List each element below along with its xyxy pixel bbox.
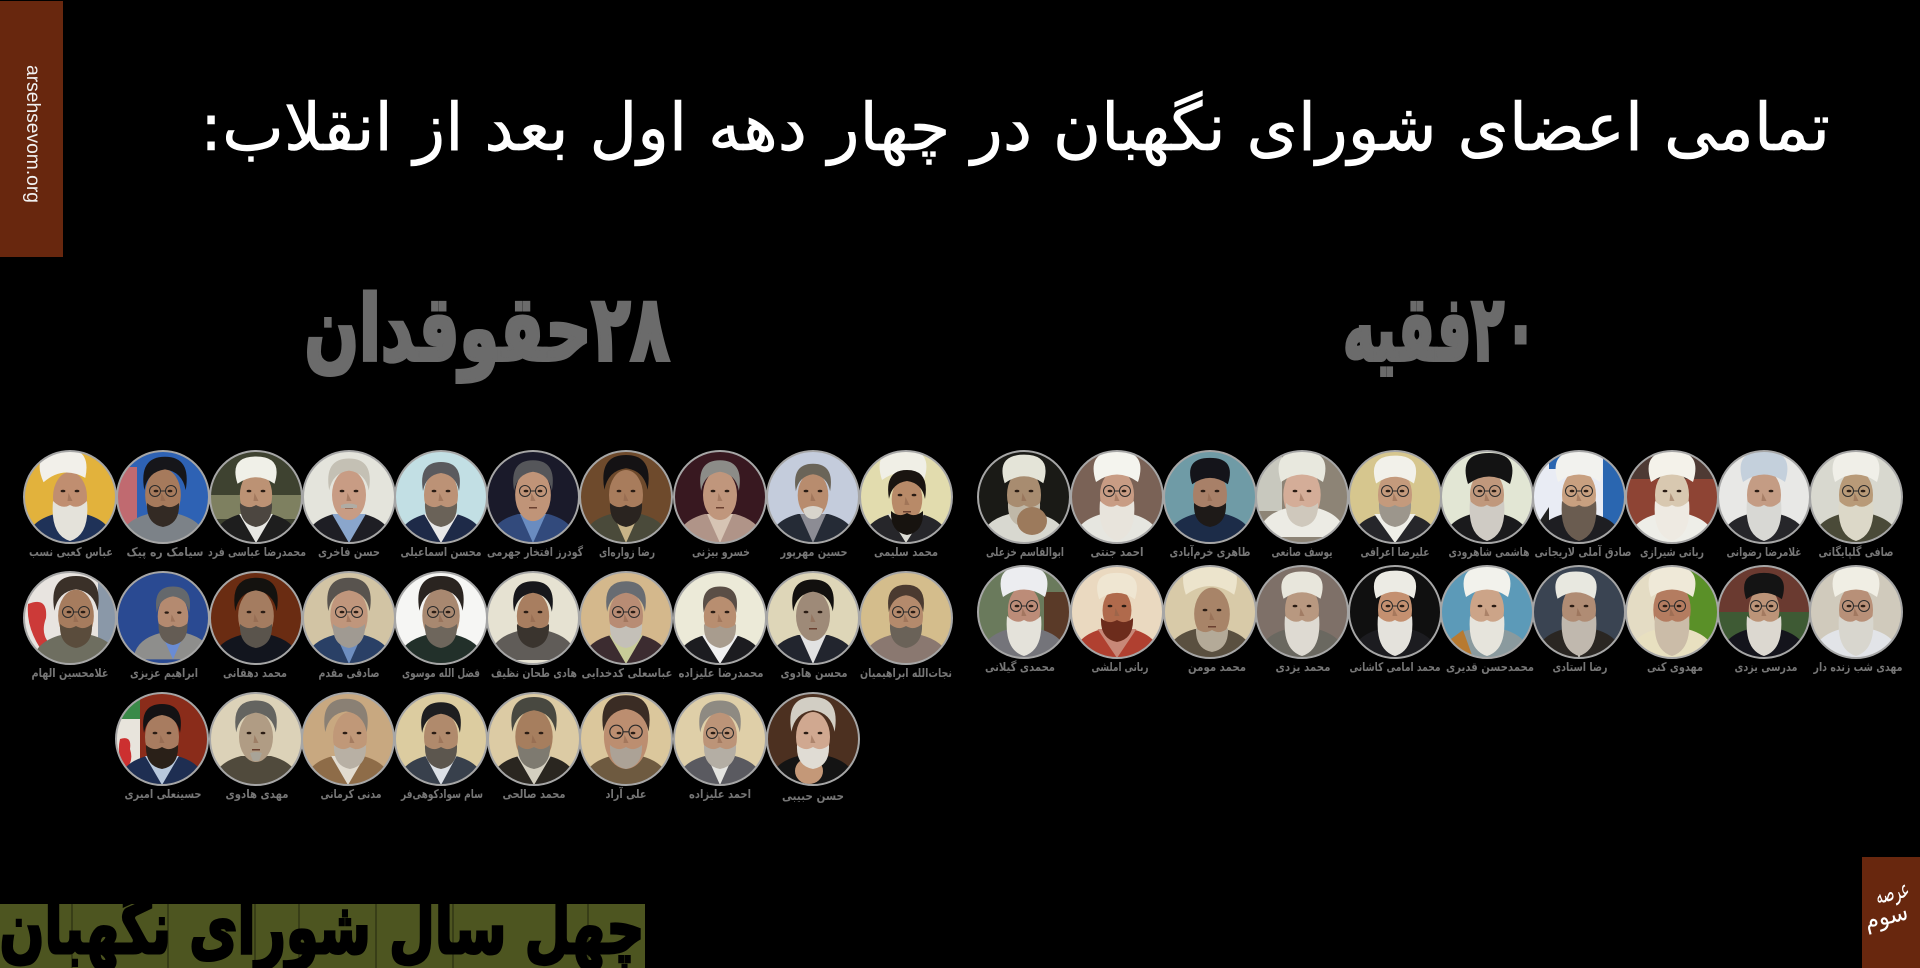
portrait: محمد یزدی bbox=[1256, 566, 1348, 674]
portrait: محمد یزدی: محمد یزدی bbox=[1276, 660, 1330, 674]
logo tab: سوم bbox=[1861, 897, 1911, 935]
portrait: عباسعلی کدخدایی: عباسعلی کدخدایی bbox=[582, 666, 672, 680]
title: تمامی اعضای شورای نگهبان در چهار دهه اول بعد از انقلاب: bbox=[200, 89, 1830, 166]
portrait: محمدی گیلانی bbox=[978, 566, 1070, 674]
portrait: گودرز افتخار جهرمی bbox=[487, 451, 583, 560]
portrait: طاهری خرم آبادی bbox=[1164, 451, 1256, 560]
portrait: محمد دهقانی: محمد دهقانی bbox=[223, 666, 287, 680]
portrait: غلامحسین الهام: غلامحسین الهام bbox=[32, 666, 108, 681]
portrait: صادقی مقدم: صادقی مقدم bbox=[318, 666, 380, 681]
portrait: گودرز افتخار جهرمی: گودرز افتخار جهرمی bbox=[487, 545, 583, 560]
portrait: محمد مومن: محمد مومن bbox=[1188, 660, 1246, 675]
portrait: ابراهیم عزیزی: ابراهیم عزیزی bbox=[130, 666, 198, 680]
portrait: مهدوی کنی bbox=[1626, 566, 1718, 675]
portrait: رضا استادی bbox=[1533, 566, 1625, 674]
portrait: صافی گلپایگانی bbox=[1810, 451, 1902, 559]
portrait: غلامرضا رضوانی: غلامرضا رضوانی bbox=[1726, 545, 1802, 560]
portrait: نجات‌الله ابراهیمیان: نجات‌الله ابراهیمیان bbox=[860, 666, 952, 680]
portrait: عباس کعبی نسب: عباس کعبی نسب bbox=[29, 545, 113, 559]
portrait: هاشمی شاهرودی bbox=[1441, 451, 1533, 560]
portrait: خسرو بیژنی bbox=[674, 451, 766, 560]
portrait: غلامرضا رضوانی bbox=[1718, 451, 1810, 560]
portrait: محسن هادوی bbox=[767, 572, 859, 681]
portrait: محمد سلیمی: محمد سلیمی bbox=[874, 545, 938, 559]
portrait: محمدرضا عباسی فرد: محمدرضا عباسی فرد bbox=[208, 545, 306, 559]
portrait: خسرو بیژنی: خسرو بیژنی bbox=[692, 545, 750, 560]
portrait: حسینعلی امیری bbox=[116, 693, 208, 801]
panel: 28 jurists portraits bbox=[24, 447, 952, 803]
portrait: مدنی کرمانی: مدنی کرمانی bbox=[320, 787, 382, 801]
portrait: علی آراد bbox=[580, 693, 672, 801]
portrait: ربانی املشی bbox=[1071, 566, 1163, 674]
portrait: سیامک ره پیک bbox=[117, 451, 209, 559]
portrait: مهدوی کنی: مهدوی کنی bbox=[1647, 660, 1703, 675]
portrait: حسین مهرپور bbox=[767, 451, 859, 560]
portrait: صافی گلپایگانی: صافی گلپایگانی bbox=[1818, 545, 1894, 559]
portrait: فضل الله موسوی bbox=[395, 572, 487, 681]
portrait: سام سوادکوهی فر bbox=[395, 693, 487, 802]
portrait: سام سوادکوهی فر: سام سوادکوهی‌فر bbox=[400, 787, 483, 802]
portrait: محسن هادوی: محسن هادوی bbox=[780, 666, 848, 681]
portrait: هادی طحان نظیف: هادی طحان نظیف bbox=[491, 666, 577, 680]
portrait: احمد علیزاده bbox=[674, 693, 766, 801]
portrait: نجات‌الله ابراهیمیان bbox=[860, 572, 952, 680]
portrait: رضا زواره‌ای: رضا زواره‌ای bbox=[599, 545, 655, 560]
portrait: محمدرضا علیزاده: محمدرضا علیزاده bbox=[678, 666, 764, 680]
portrait: محمد سلیمی bbox=[860, 449, 952, 559]
portrait: حسن فاخری: حسن فاخری bbox=[318, 545, 380, 559]
portrait: مهدی هادوی bbox=[210, 693, 302, 802]
portrait: سیامک ره پیک: سیامک ره پیک bbox=[126, 545, 204, 559]
portrait: یوسف صانعی: یوسف صانعی bbox=[1272, 545, 1332, 560]
portrait: عباسعلی کدخدایی bbox=[580, 572, 672, 680]
heading: 28 jurists: ۲۸حقوقدان bbox=[304, 277, 670, 382]
portrait: حسن فاخری bbox=[303, 451, 395, 559]
portrait: حسینعلی امیری: حسینعلی امیری bbox=[124, 787, 202, 801]
portrait: ابوالقاسم خزعلی: ابوالقاسم خزعلی bbox=[986, 545, 1064, 560]
portrait: احمد جنتی: احمد جنتی bbox=[1090, 545, 1144, 559]
logo tab bbox=[1861, 857, 1920, 968]
portrait: رضا استادی: رضا استادی bbox=[1552, 660, 1608, 674]
portrait: یوسف صانعی bbox=[1256, 451, 1348, 560]
portrait: رضا زواره‌ای bbox=[580, 451, 672, 560]
portrait: مهدی هادوی: مهدی هادوی bbox=[226, 787, 289, 802]
portrait: محمدحسن قدیری bbox=[1441, 566, 1534, 674]
portrait: مدنی کرمانی bbox=[302, 693, 394, 801]
portrait: عباس کعبی نسب bbox=[24, 447, 116, 559]
portrait: محمد صالحی: محمد صالحی bbox=[502, 787, 566, 801]
portrait: مدرسی یزدی: مدرسی یزدی bbox=[1734, 660, 1798, 674]
portrait: صادق آملی لاریجانی bbox=[1533, 451, 1632, 559]
portrait: حسین مهرپور: حسین مهرپور bbox=[780, 545, 848, 560]
portrait: غلامحسین الهام bbox=[24, 572, 120, 681]
portrait: محمد مومن bbox=[1164, 559, 1256, 675]
portrait: محمدرضا علیزاده bbox=[674, 572, 766, 680]
portrait: ربانی املشی: ربانی املشی bbox=[1092, 660, 1149, 674]
side tab: website: arsehsevom.org bbox=[22, 65, 43, 203]
portrait: محمد امامی کاشانی: محمد امامی کاشانی bbox=[1350, 660, 1440, 674]
heading: 20 clerics: ۲۰فقیه bbox=[1343, 277, 1537, 382]
portrait: محسن اسماعیلی bbox=[395, 451, 487, 559]
portrait: محمد صالحی bbox=[488, 693, 580, 801]
portrait: ربانی شیرازی: ربانی شیرازی bbox=[1640, 545, 1704, 559]
portrait: حسن حبیبی bbox=[767, 693, 859, 803]
portrait: صادقی مقدم bbox=[303, 572, 395, 681]
portrait: هاشمی شاهرودی: هاشمی شاهرودی bbox=[1448, 545, 1530, 560]
portrait: محمد امامی کاشانی bbox=[1349, 566, 1441, 674]
portrait: احمد علیزاده: احمد علیزاده bbox=[689, 787, 751, 801]
portrait: ربانی شیرازی bbox=[1626, 451, 1718, 559]
portrait: طاهری خرم آبادی: طاهری خرم‌آبادی bbox=[1170, 544, 1250, 560]
portrait: محمدحسن قدیری: محمدحسن قدیری bbox=[1446, 660, 1534, 674]
portrait: علیرضا اعرافی: علیرضا اعرافی bbox=[1360, 545, 1430, 559]
portrait: مهدی شب زنده دار bbox=[1810, 566, 1902, 674]
portrait: علی آراد: علی آراد bbox=[606, 786, 646, 801]
portrait: ابراهیم عزیزی bbox=[117, 572, 213, 680]
portrait: هادی طحان نظیف bbox=[487, 572, 579, 680]
portrait: حسن حبیبی: حسن حبیبی bbox=[782, 789, 844, 803]
portrait: محمدرضا عباسی فرد bbox=[208, 451, 306, 559]
portrait: صادق آملی لاریجانی: صادق آملی لاریجانی bbox=[1534, 544, 1632, 559]
portrait: علیرضا اعرافی bbox=[1349, 451, 1441, 559]
portrait: ابوالقاسم خزعلی bbox=[978, 451, 1070, 560]
panel: 20 clerics portraits bbox=[978, 451, 1902, 675]
side tab: website bbox=[0, 1, 63, 257]
portrait: احمد جنتی bbox=[1071, 451, 1163, 559]
portrait: محمدی گیلانی: محمدی گیلانی bbox=[985, 660, 1055, 674]
banner: forty years of the guardian council: چهل سال شورای نگهبان bbox=[0, 886, 644, 968]
portrait: محمد دهقانی bbox=[210, 572, 302, 680]
portrait: محسن اسماعیلی: محسن اسماعیلی bbox=[400, 545, 482, 559]
portrait: مدرسی یزدی bbox=[1718, 566, 1810, 674]
portrait: فضل الله موسوی: فضل الله موسوی bbox=[402, 666, 480, 681]
